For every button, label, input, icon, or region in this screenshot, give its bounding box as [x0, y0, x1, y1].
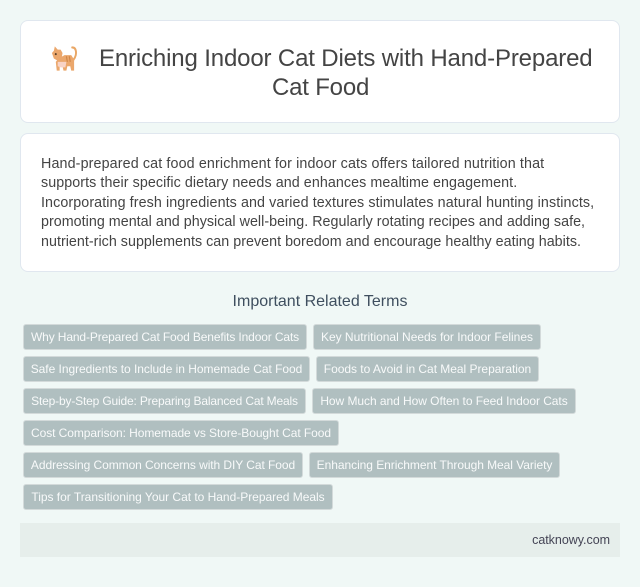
- tag: Safe Ingredients to Include in Homemade Cat Food: [31, 362, 302, 376]
- description text: nutrient-rich supplements can prevent boredom and encourage healthy eating habits.: [41, 234, 581, 250]
- tag: Cost Comparison: Homemade vs Store-Bought Cat Food: [31, 426, 331, 440]
- footer source text: catknowy.com: [532, 533, 610, 547]
- panel: description card: [20, 133, 620, 272]
- description text: promoting mental and physical well-being. Regularly rotating recipes and adding safe,: [41, 214, 585, 230]
- tag: [313, 324, 541, 350]
- title text: Enriching Indoor Cat Diets with Hand-Prepared: [99, 45, 593, 72]
- panel: title card: [20, 20, 620, 123]
- tag: Key Nutritional Needs for Indoor Felines: [321, 330, 533, 344]
- title text: Cat Food: [272, 74, 369, 101]
- tag: How Much and How Often to Feed Indoor Cats: [320, 394, 568, 408]
- heading: important related terms: Important Related Terms: [233, 293, 407, 310]
- tag: Foods to Avoid in Cat Meal Preparation: [324, 362, 531, 376]
- panel: related term tags: [23, 324, 576, 510]
- description text: supports their specific dietary needs and enhances mealtime engagement.: [41, 175, 517, 191]
- tag: [23, 356, 310, 382]
- tag: Addressing Common Concerns with DIY Cat Food: [31, 458, 295, 472]
- tag: Why Hand-Prepared Cat Food Benefits Indoor Cats: [31, 330, 299, 344]
- title text: [99, 45, 593, 101]
- description text: Hand-prepared cat food enrichment for indoor cats offers tailored nutrition that: [41, 156, 544, 172]
- tag: [23, 484, 333, 510]
- tag: [23, 452, 303, 478]
- description text: [41, 156, 594, 250]
- tag: [316, 356, 539, 382]
- tag: [23, 324, 307, 350]
- tag: [312, 388, 576, 414]
- tag: Tips for Transitioning Your Cat to Hand-Prepared Meals: [31, 490, 325, 504]
- icon: cat: [52, 46, 77, 71]
- footer bar: [20, 523, 620, 557]
- tag: [23, 420, 339, 446]
- description text: Incorporating fresh ingredients and varied textures stimulates natural hunting instincts,: [41, 195, 594, 211]
- tag: Step-by-Step Guide: Preparing Balanced Cat Meals: [31, 394, 298, 408]
- tag: [23, 388, 306, 414]
- tag: [309, 452, 560, 478]
- tag: Enhancing Enrichment Through Meal Variety: [317, 458, 552, 472]
